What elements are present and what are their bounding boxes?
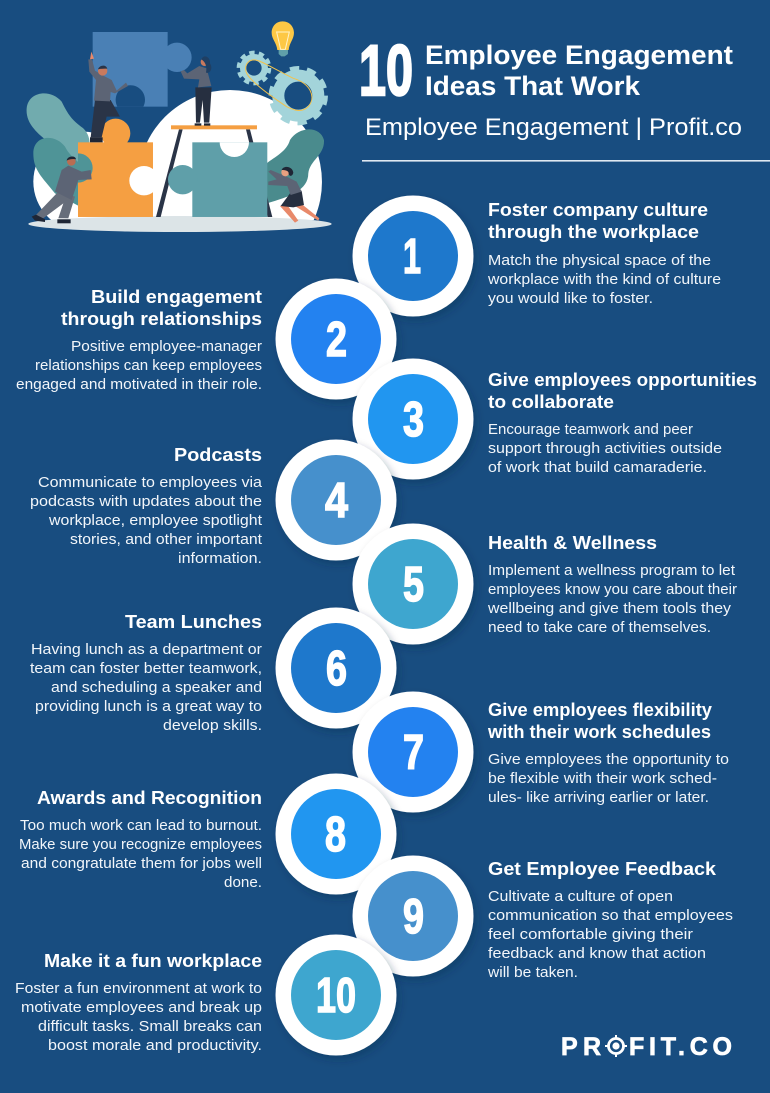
item 7 text: Give employees flexibility (488, 700, 712, 720)
item 8 text: and congratulate them for jobs well (21, 856, 262, 872)
item 4 text: Podcasts (174, 445, 262, 465)
big number 10: 10 (359, 32, 413, 111)
circle 5 (352, 524, 474, 644)
item 2 text: through relationships (61, 309, 262, 329)
item 10 text: boost morale and productivity. (48, 1038, 262, 1054)
item 1 text: you would like to foster. (488, 291, 653, 307)
item 4 text (30, 445, 263, 567)
item 5 text: employees know you care about their (488, 582, 737, 598)
leaf right (267, 129, 324, 203)
item 2 text (16, 287, 262, 393)
item 9 text: Cultivate a culture of open (488, 889, 673, 905)
circle 6 (276, 608, 396, 728)
item 10 text (15, 951, 262, 1054)
item 2 text: relationships can keep employees (35, 358, 262, 374)
item 6 text: and scheduling a speaker and (51, 680, 262, 696)
icon: light bulb (272, 21, 294, 56)
circle 7: 7 (403, 726, 424, 780)
item 4 text: podcasts with updates about the (30, 494, 262, 510)
person pushing teal piece (268, 167, 319, 223)
item 6 text: team can foster better teamwork, (30, 661, 262, 677)
circle 4: 4 (325, 474, 348, 528)
item 6 text: Having lunch as a department or (31, 642, 262, 658)
item 3 text: support through activities outside (488, 441, 722, 457)
logo: Profit.co: FIT.CO (629, 1033, 732, 1061)
circle 10: 10 (316, 969, 356, 1023)
teal puzzle piece (168, 142, 267, 217)
item 9 text: communication so that employees (488, 908, 733, 924)
item 4 text: workplace, employee spotlight (48, 513, 262, 529)
item 7 text: be flexible with their work sched- (488, 771, 717, 787)
circle 1: 1 (403, 230, 421, 284)
circle 2 (276, 278, 396, 400)
gears with belt (239, 53, 326, 123)
circle 8 (276, 774, 396, 894)
item 8 text: Too much work can lead to burnout. (20, 818, 262, 834)
item 4 text: stories, and other important (70, 532, 262, 548)
item 10 text: Make it a fun workplace (44, 951, 262, 971)
leaves left (27, 93, 90, 207)
circle 9: 9 (403, 890, 424, 944)
item 8 text: done. (224, 875, 262, 891)
item 3 text (488, 370, 757, 476)
item 3 text: Give employees opportunities (488, 370, 757, 390)
blue puzzle piece (93, 32, 192, 107)
ground ellipse (28, 216, 332, 232)
circle 1 (352, 196, 474, 316)
item 1 text (487, 200, 721, 307)
circle 6: 6 (326, 642, 347, 696)
title lines: Employee Engagement (425, 40, 733, 70)
item 4 text: information. (178, 551, 262, 567)
item 6 text: providing lunch is a great way to (35, 699, 262, 715)
title (359, 32, 733, 111)
item 6 text: Team Lunches (125, 612, 262, 632)
item 1 text: Match the physical space of the (488, 253, 711, 269)
item 6 text: develop skills. (163, 718, 262, 734)
person on ladder (88, 52, 128, 142)
item 9 text: will be taken. (487, 965, 578, 981)
item 5 text: Health & Wellness (488, 533, 657, 553)
item 1 text: Foster company culture (488, 200, 708, 220)
item 8 text: Awards and Recognition (37, 788, 262, 808)
item 5 text: Implement a wellness program to let (488, 563, 735, 579)
item 5 text: wellbeing and give them tools they (487, 601, 732, 617)
title: Ideas That Work (425, 71, 641, 101)
item 10 text: motivate employees and break up (21, 1000, 262, 1016)
item 2 text: Positive employee-manager (71, 339, 262, 355)
circle 2: 2 (326, 313, 347, 367)
white backdrop circles (33, 90, 322, 220)
circle 10 (276, 934, 396, 1056)
item 1 text: through the workplace (488, 222, 699, 242)
circle 4 (276, 440, 396, 560)
item 9 text: feedback and know that action (488, 946, 706, 962)
item 10 text: difficult tasks. Small breaks can (38, 1019, 262, 1035)
item 5 text (487, 533, 737, 636)
item 7 text: ules- like arriving earlier or later. (488, 790, 709, 806)
item 3 text: to collaborate (488, 392, 614, 412)
circle 9 (352, 856, 474, 976)
item 2 text: engaged and motivated in their role. (16, 377, 262, 393)
circle 5: 5 (403, 558, 424, 612)
illustration: team assembling puzzle pieces (26, 21, 332, 232)
logo: Profit.co (561, 1033, 732, 1061)
circle 8: 8 (325, 808, 346, 862)
logo: Profit.co: PR (561, 1033, 601, 1061)
item 1 text: workplace with the kind of culture (487, 272, 721, 288)
table (156, 125, 272, 217)
item 9 text: Get Employee Feedback (488, 859, 717, 879)
circle 3 (352, 358, 474, 480)
item 4 text: Communicate to employees via (38, 475, 263, 491)
person on table (181, 56, 212, 126)
item 10 text: Foster a fun environment at work to (15, 981, 262, 997)
item 5 text: need to take care of themselves. (488, 620, 711, 636)
item 2 text: Build engagement (91, 287, 262, 307)
person pushing orange piece (32, 156, 92, 223)
item 6 text (30, 612, 262, 734)
icon: logo target (605, 1035, 627, 1057)
item 7 text (487, 700, 729, 806)
subtitle: Employee Engagement | Profit.co (365, 114, 742, 141)
item 8 text (19, 788, 262, 891)
item 7 text: with their work schedules (487, 722, 711, 742)
circle 3: 3 (403, 393, 424, 447)
numbered circles (276, 196, 474, 1056)
circle 7 (352, 692, 474, 812)
item 7 text: Give employees the opportunity to (488, 752, 729, 768)
item 9 text: feel comfortable giving their (488, 927, 693, 943)
orange puzzle piece (78, 119, 159, 217)
item 3 text: Encourage teamwork and peer (488, 422, 693, 438)
item 8 text: Make sure you recognize employees (19, 837, 262, 853)
item 9 text (487, 859, 733, 981)
item 3 text: of work that build camaraderie. (488, 460, 707, 476)
